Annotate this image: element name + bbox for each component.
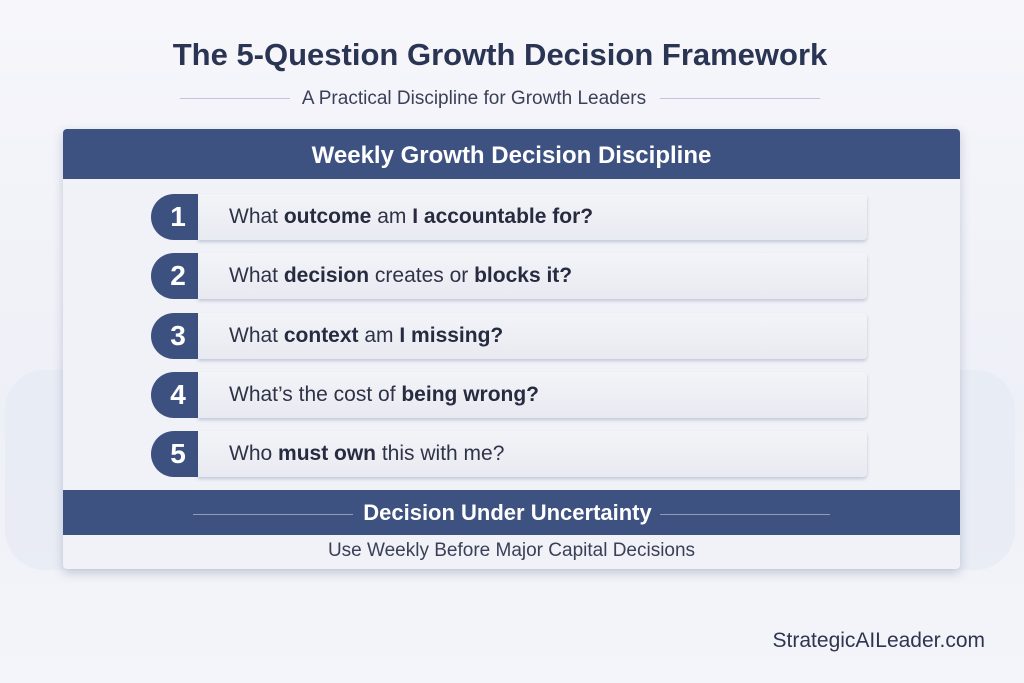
question 5 bbox=[151, 431, 868, 480]
footer note: Use Weekly Before Major Capital Decisions bbox=[328, 540, 695, 561]
question 3 bbox=[151, 313, 868, 362]
title: The 5-Question Growth Decision Framework bbox=[173, 37, 827, 72]
bottom band bbox=[63, 490, 960, 535]
question 4 bbox=[151, 372, 868, 422]
question 4: 4 bbox=[170, 379, 186, 410]
footer url: StrategicAILeader.com bbox=[773, 629, 985, 652]
question 3: What context am I missing? bbox=[229, 324, 503, 347]
question 3: 3 bbox=[170, 320, 186, 351]
header band: Weekly Growth Decision Discipline bbox=[312, 142, 711, 169]
subtitle: A Practical Discipline for Growth Leaders bbox=[302, 88, 646, 109]
question 1: What outcome am I accountable for? bbox=[229, 205, 593, 228]
panel: framework bbox=[63, 129, 960, 569]
background platform bbox=[5, 370, 1015, 570]
bottom band: Decision Under Uncertainty bbox=[363, 500, 652, 525]
header band bbox=[63, 129, 960, 179]
question 4: What’s the cost of being wrong? bbox=[229, 383, 539, 406]
question 5: 5 bbox=[170, 438, 186, 469]
question 2: What decision creates or blocks it? bbox=[229, 264, 572, 287]
question 2: 2 bbox=[170, 260, 186, 291]
question 2 bbox=[151, 253, 868, 302]
question 1: 1 bbox=[170, 201, 186, 232]
question 1 bbox=[151, 194, 868, 244]
question 5: Who must own this with me? bbox=[229, 442, 504, 465]
